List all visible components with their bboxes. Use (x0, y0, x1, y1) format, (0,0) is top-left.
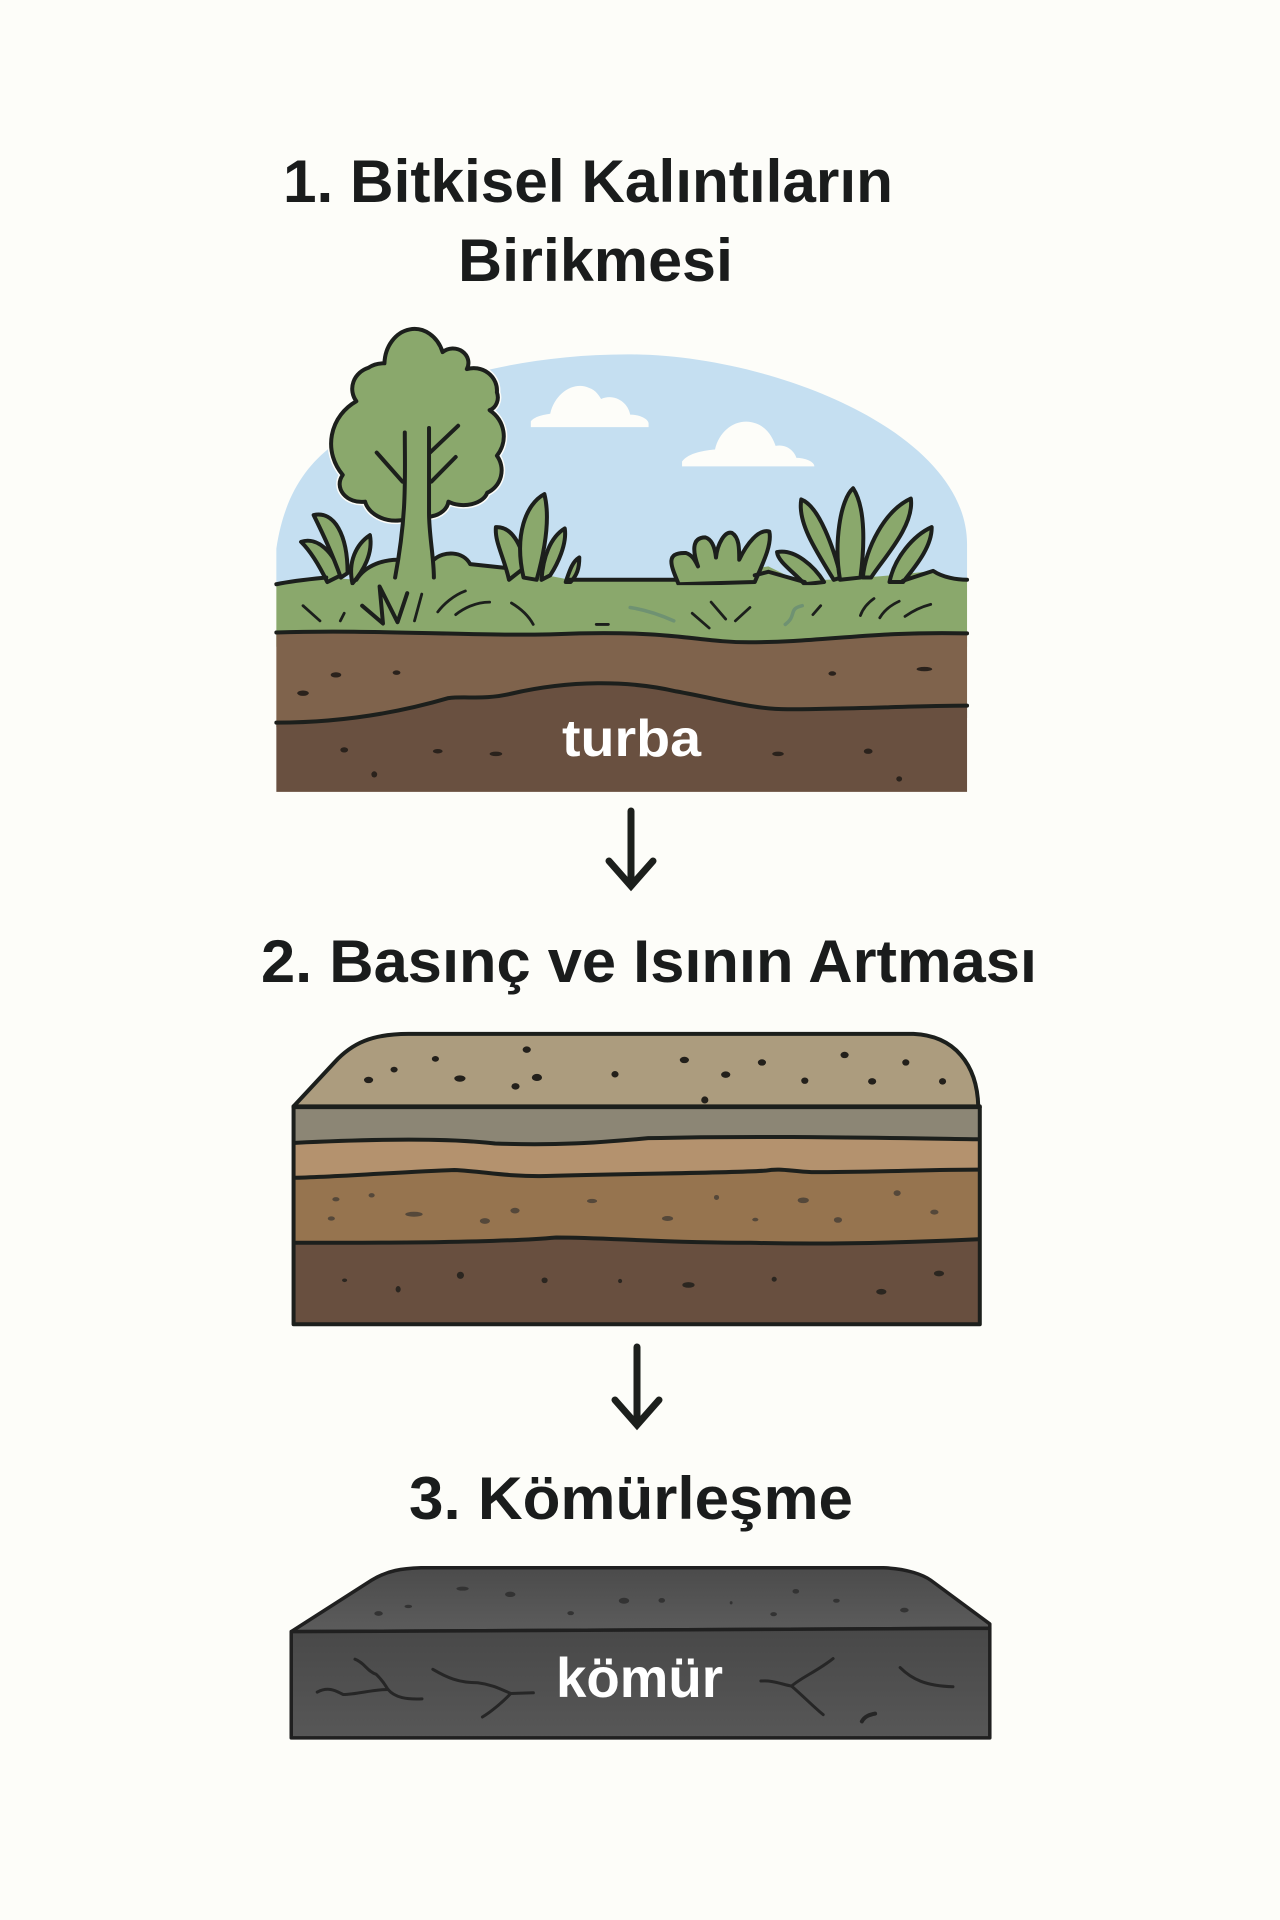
soil specks (297, 667, 932, 782)
top sand layer (294, 1034, 978, 1106)
label: turba: turba (562, 710, 702, 768)
coal specks (374, 1587, 909, 1616)
heading: step 1 (283, 148, 893, 294)
cloud right (682, 422, 814, 466)
sky (276, 354, 967, 584)
specks: top layer (364, 1046, 946, 1104)
grass clump 1 (301, 515, 371, 583)
cloud left (531, 386, 649, 427)
specks: middle layer (328, 1190, 938, 1224)
arrow: step 2 to step 3 (615, 1347, 659, 1425)
panel: peat landscape illustration (276, 329, 967, 792)
strata outlines (294, 1106, 980, 1324)
grass clump 4 (777, 488, 932, 584)
panel: rock strata illustration (294, 1034, 980, 1324)
heading: step 2: 2. Basınç ve Isının Artması (261, 928, 1037, 995)
coal top face (291, 1568, 990, 1632)
coal front face (291, 1628, 990, 1738)
grass clump 3 (671, 531, 770, 584)
label: kömür: kömür (556, 1646, 723, 1709)
arrow: step 1 to step 2 (609, 811, 653, 886)
grass ticks (303, 586, 931, 628)
soil layer lower: peat (276, 683, 967, 792)
coal cracks (317, 1659, 953, 1721)
heading: step 1: Birikmesi (458, 227, 733, 294)
panel: coal block illustration (291, 1568, 990, 1738)
horizon line (276, 553, 967, 584)
ground: grass band (276, 553, 967, 647)
heading: step 1: 1. Bitkisel Kalıntıların (283, 148, 893, 215)
hide clump bases (320, 585, 962, 598)
tree (331, 329, 504, 584)
dark brown layer (295, 1237, 978, 1324)
middle brown layer (295, 1170, 978, 1257)
grass clump 2 (496, 494, 579, 582)
heading: step 3: 3. Kömürleşme (409, 1465, 853, 1532)
gray layer (294, 1107, 980, 1157)
soil layer upper (276, 632, 967, 727)
light brown layer (295, 1137, 978, 1193)
specks: bottom layer (342, 1271, 944, 1295)
